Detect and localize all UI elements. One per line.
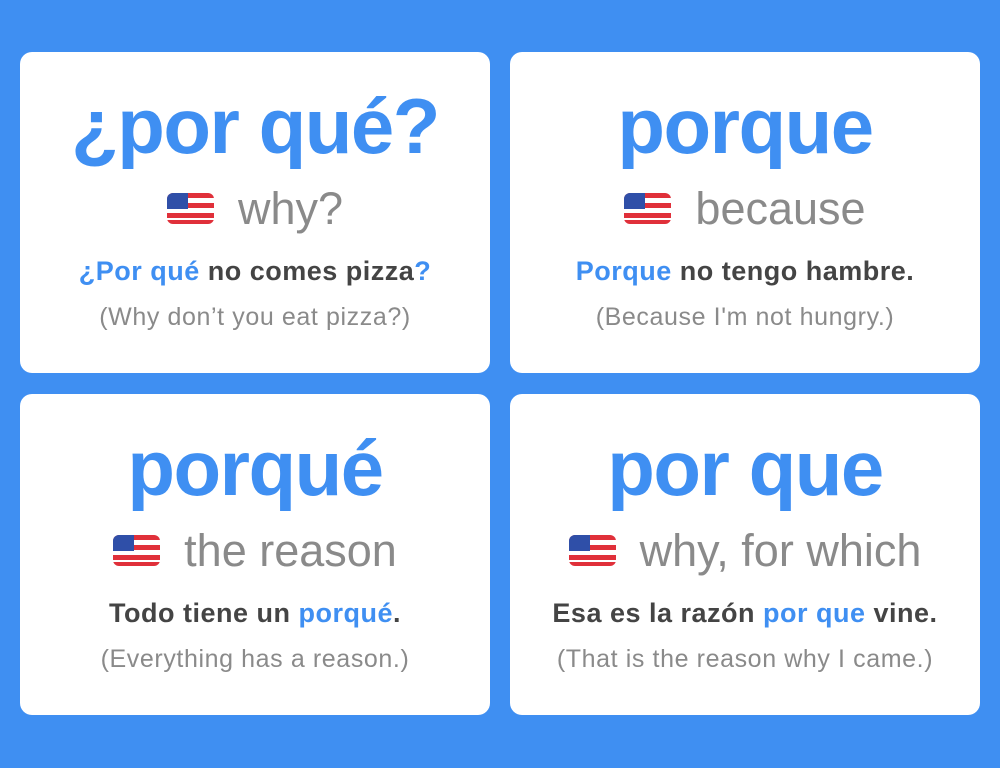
english translation: (That is the reason why I came.) [557, 645, 933, 673]
translation with flag: why? [238, 183, 343, 234]
panel: porqué [20, 394, 490, 715]
english translation: (Because I'm not hungry.) [596, 303, 894, 331]
heading: ¿por qué? [71, 82, 439, 170]
english translation: (Why don’t you eat pizza?) [99, 303, 411, 331]
translation with flag: why, for which [640, 525, 921, 576]
example sentence: Esa es la razón por que vine. [552, 598, 938, 628]
panel: por que [510, 394, 980, 715]
panel: porque [510, 52, 980, 373]
panel: por qué [20, 52, 490, 373]
translation with flag: the reason [184, 525, 397, 576]
english translation: (Everything has a reason.) [101, 645, 409, 673]
translation with flag [167, 183, 343, 234]
example sentence: Todo tiene un porqué. [109, 598, 401, 628]
example sentence: Porque no tengo hambre. [576, 256, 914, 286]
heading: por que [607, 424, 883, 512]
translation with flag: because [695, 183, 866, 234]
heading: porque [617, 82, 873, 170]
example sentence: ¿Por qué no comes pizza? [79, 256, 431, 286]
heading: porqué [127, 424, 383, 512]
